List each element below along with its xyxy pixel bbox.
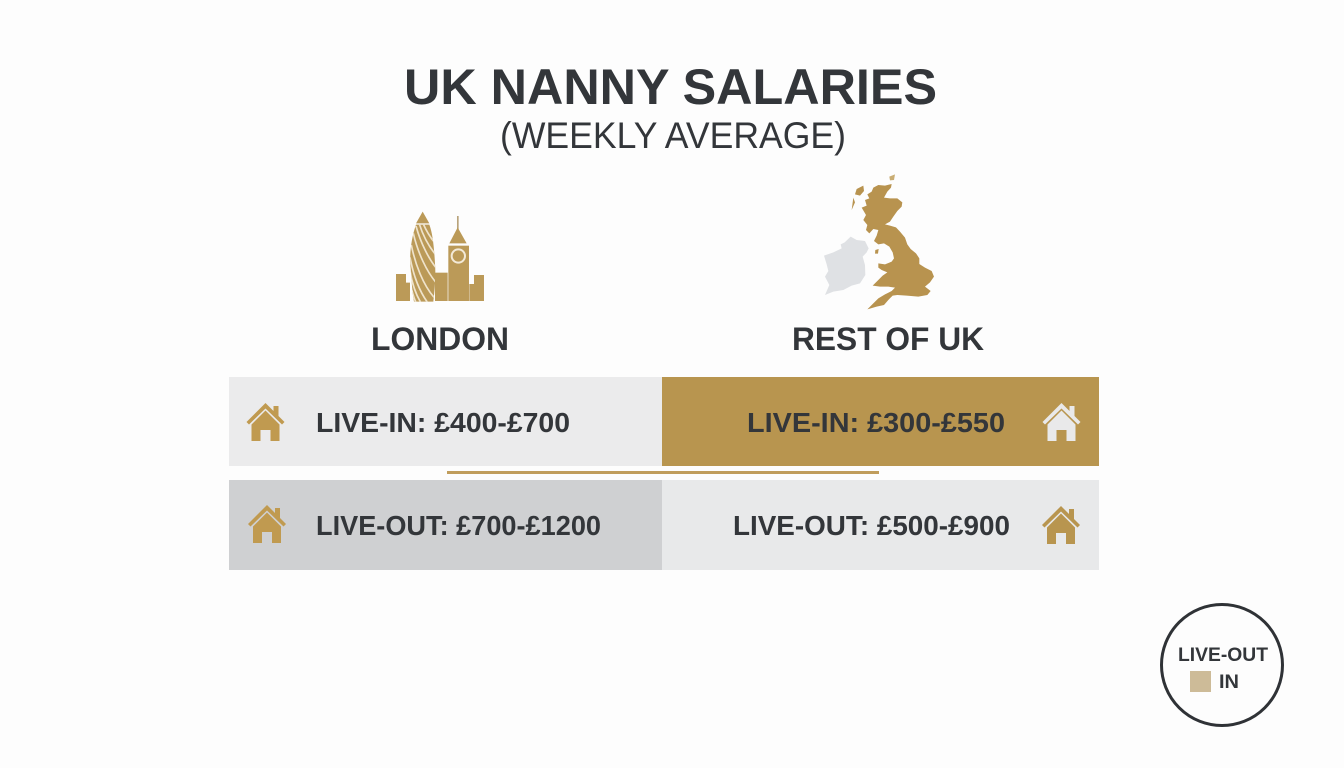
divider line (447, 471, 879, 474)
legend swatch (1190, 671, 1211, 692)
label: London live-out salary: LIVE-OUT: £700-£1200 (316, 510, 601, 541)
legend label: in: IN (1219, 672, 1239, 693)
icon: house (1042, 506, 1080, 544)
legend label: live-out: LIVE-OUT (1178, 645, 1268, 666)
icon: house (248, 505, 286, 543)
heading: London: LONDON (371, 321, 509, 357)
title: UK NANNY SALARIES (404, 59, 937, 115)
panel: London live-out (229, 480, 662, 570)
panel: Rest of UK live-out (662, 480, 1099, 570)
label: Rest of UK live-out salary: LIVE-OUT: £500-£900 (733, 510, 1010, 541)
icon: house (1042, 403, 1080, 441)
label: London live-in salary: LIVE-IN: £400-£700 (316, 407, 570, 438)
icon: house (246, 403, 284, 441)
label: Rest of UK live-in salary: LIVE-IN: £300-£550 (747, 407, 1005, 438)
panel: Rest of UK live-in (662, 377, 1099, 466)
legend (1162, 604, 1282, 726)
icon: London skyline (396, 212, 484, 304)
icon: map of UK and Ireland (824, 174, 934, 309)
heading: Rest of UK: REST OF UK (792, 321, 984, 357)
subtitle: (WEEKLY AVERAGE) (500, 115, 846, 156)
panel: London live-in (229, 377, 662, 466)
